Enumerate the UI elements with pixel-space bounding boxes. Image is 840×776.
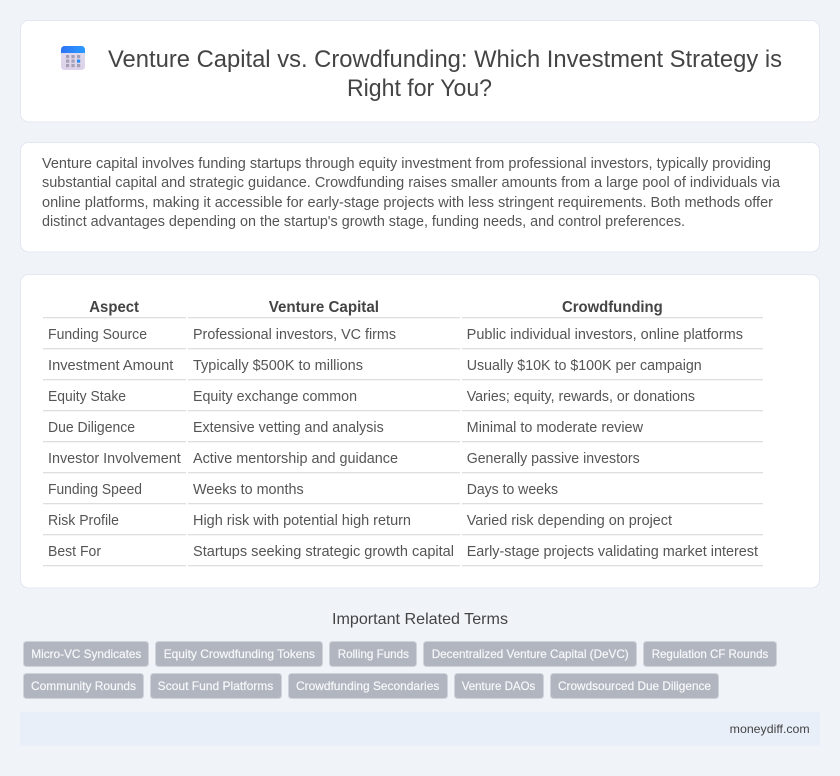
row: investor involvement: Generally passive investors	[467, 451, 640, 467]
row: funding source: Public individual investors, online platforms	[467, 327, 743, 343]
row: funding source: Professional investors, VC firms	[193, 327, 396, 343]
tag	[150, 674, 282, 698]
related terms tags	[24, 642, 776, 698]
tag: Community Rounds	[31, 679, 136, 693]
row: funding speed: Weeks to months	[193, 482, 304, 498]
row: investment amount: Investment Amount	[48, 358, 173, 374]
tag	[644, 642, 776, 666]
tag	[288, 674, 448, 698]
row: due diligence	[48, 420, 644, 436]
title: Venture Capital vs. Crowdfunding: Which Investment Strategy is	[108, 46, 782, 73]
row: equity stake: Varies; equity, rewards, or donations	[467, 389, 695, 405]
row: investment amount	[48, 358, 702, 374]
tag: Crowdfunding Secondaries	[296, 679, 439, 693]
row: best for: Startups seeking strategic growth capital	[193, 544, 454, 560]
icon: calendar	[61, 46, 85, 70]
row: best for	[48, 544, 758, 560]
title: Right for You?	[347, 75, 492, 102]
row: best for: Best For	[48, 544, 101, 560]
row: best for: Early-stage projects validating market interest	[467, 544, 758, 560]
row: investor involvement: Active mentorship and guidance	[193, 451, 398, 467]
table header: Venture Capital	[269, 299, 379, 316]
tag	[156, 642, 322, 666]
panel: introduction: substantial capital and strategic guidance. Crowdfunding raises smaller amounts from a large pool of individuals via	[42, 175, 780, 191]
tag	[24, 674, 144, 698]
panel: comparison table	[20, 274, 820, 588]
row: risk profile: Varied risk depending on project	[467, 513, 672, 529]
row: investor involvement: Investor Involvement	[48, 451, 181, 467]
row: equity stake: Equity exchange common	[193, 389, 357, 405]
row: funding speed	[48, 482, 558, 498]
row: risk profile	[48, 513, 672, 529]
row: equity stake: Equity Stake	[48, 389, 126, 405]
row: investment amount: Typically $500K to millions	[193, 358, 363, 374]
footer: moneydiff.com	[730, 722, 810, 736]
tag	[330, 642, 416, 666]
tag: Equity Crowdfunding Tokens	[164, 647, 315, 661]
row: funding speed: Days to weeks	[467, 482, 558, 498]
panel: introduction: online platforms, making it accessible for early-stage projects with less stringent requirements. Both methods offer	[42, 195, 773, 211]
tag: Rolling Funds	[338, 647, 409, 661]
header panel	[20, 20, 820, 122]
tag	[24, 642, 148, 666]
title	[108, 46, 782, 102]
panel: introduction: Venture capital involves funding startups through equity investment from professional investors, typically providing	[42, 156, 771, 172]
tag: Micro-VC Syndicates	[31, 647, 141, 661]
table header: Aspect	[89, 299, 140, 316]
row: equity stake	[48, 389, 695, 405]
row: funding speed: Funding Speed	[48, 482, 142, 498]
footer	[20, 712, 820, 746]
row: risk profile: Risk Profile	[48, 513, 119, 529]
table header	[89, 299, 663, 316]
panel: introduction	[20, 142, 820, 252]
tag	[454, 674, 544, 698]
tag: Regulation CF Rounds	[652, 647, 768, 661]
row: funding source: Funding Source	[48, 327, 147, 343]
row: investor involvement	[48, 451, 640, 467]
row: funding source	[48, 327, 743, 343]
tag: Decentralized Venture Capital (DeVC)	[432, 647, 629, 661]
row: investment amount: Usually $10K to $100K per campaign	[467, 358, 702, 374]
row: due diligence: Due Diligence	[48, 420, 135, 436]
row: due diligence: Extensive vetting and analysis	[193, 420, 384, 436]
tag: Crowdsourced Due Diligence	[558, 679, 711, 693]
panel: introduction: distinct advantages depending on the startup's growth stage, funding needs, and control preferences.	[42, 214, 685, 230]
tag: Scout Fund Platforms	[158, 679, 273, 693]
row: risk profile: High risk with potential high return	[193, 513, 411, 529]
tag: Venture DAOs	[462, 679, 535, 693]
tag	[550, 674, 718, 698]
related terms heading: Important Related Terms	[332, 611, 508, 628]
table header: Crowdfunding	[562, 299, 663, 316]
row: due diligence: Minimal to moderate review	[467, 420, 644, 436]
tag	[424, 642, 636, 666]
